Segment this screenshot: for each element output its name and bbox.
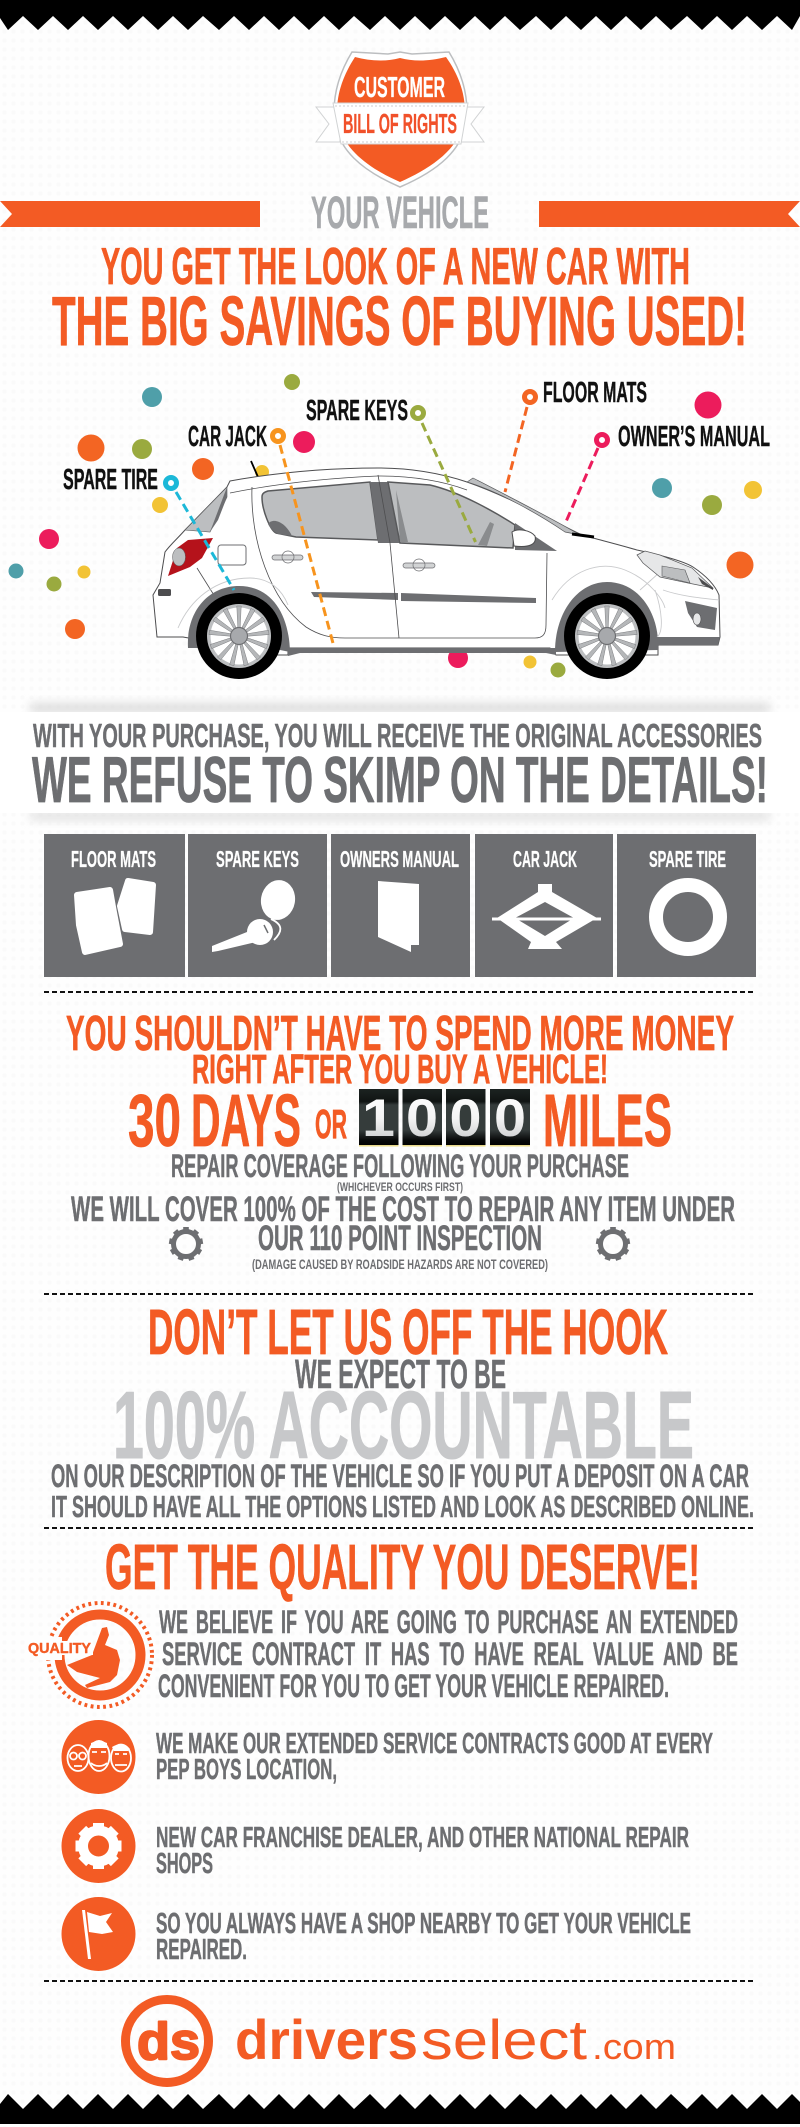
section: accountability — [51, 1296, 754, 1524]
note: roadside hazards: (DAMAGE CAUSED BY ROADSIDE HAZARDS ARE NOT COVERED) — [252, 1257, 548, 1272]
tail light — [168, 538, 213, 576]
logo monogram: ds — [137, 2013, 200, 2071]
panel: spare tire — [617, 834, 756, 977]
odometer: 1000: 0 — [406, 1089, 438, 1148]
headlight — [637, 551, 713, 590]
rear wheel — [196, 593, 282, 679]
dashed dividers — [44, 992, 756, 1981]
callout: car jack — [188, 421, 334, 647]
icon: quality thumbs-up badge: QUALITY — [28, 1641, 91, 1657]
illustration: white hatchback car — [153, 461, 720, 679]
benefit 2 line 2: SHOPS — [156, 1848, 213, 1880]
callout: spare keys: SPARE KEYS — [306, 395, 408, 427]
icon: gear left — [169, 1227, 203, 1261]
odometer: 1000 — [359, 1089, 530, 1148]
badge: customer bill of rights — [316, 52, 484, 187]
benefit 3 line 2: REPAIRED. — [156, 1934, 247, 1966]
icon: manual — [378, 881, 419, 952]
front seat shadow — [396, 490, 494, 546]
icon: keys — [212, 877, 298, 952]
panel: floor mats — [44, 834, 185, 977]
banner text: YOUR VEHICLE — [311, 187, 489, 238]
odometer: 1000: 1 — [362, 1089, 395, 1148]
callout: spare tire — [63, 464, 234, 590]
panel: spare tire: SPARE TIRE — [649, 846, 726, 872]
antenna — [251, 461, 266, 478]
benefit 1 line 2: PEP BOYS LOCATION, — [156, 1754, 337, 1786]
arch lines — [178, 566, 719, 637]
subhead: WE EXPECT TO BE — [295, 1351, 506, 1397]
sill — [288, 648, 556, 656]
front door window — [388, 482, 515, 548]
wiper — [572, 534, 594, 537]
icon: quality thumbs-up badge — [26, 1603, 152, 1707]
panel: car jack: CAR JACK — [513, 846, 577, 872]
door trim — [311, 592, 536, 603]
callout: owner's manual — [565, 421, 770, 524]
note: whichever occurs first: (WHICHEVER OCCURS FIRST) — [337, 1182, 463, 1194]
rear reflector — [158, 589, 171, 596]
section: repair coverage — [66, 1007, 735, 1272]
wing mirror — [512, 530, 535, 547]
callout: car jack: CAR JACK — [188, 421, 267, 453]
icon: gear badge — [62, 1809, 136, 1883]
badge text: CUSTOMER — [354, 72, 445, 104]
car body — [153, 468, 720, 655]
icon: gear right — [596, 1227, 630, 1261]
label: or: OR — [315, 1101, 347, 1147]
door handles — [272, 551, 435, 571]
rear door window — [262, 482, 378, 540]
panel: floor mats: FLOOR MATS — [71, 846, 156, 872]
wordmark: drivers: drivers — [235, 2008, 418, 2071]
pillar — [370, 482, 400, 543]
panel: spare keys: SPARE KEYS — [216, 846, 299, 872]
panel: car jack — [475, 834, 613, 977]
icon: flag badge — [62, 1897, 136, 1971]
wordmark: select: select — [421, 2008, 587, 2071]
ribbon — [316, 103, 484, 144]
callout: spare tire: SPARE TIRE — [63, 464, 158, 496]
headline — [52, 238, 747, 360]
roof line — [230, 476, 467, 493]
stat: days: DAYS — [191, 1079, 301, 1162]
callout: floor mats: FLOOR MATS — [543, 377, 647, 409]
confetti dots — [8, 374, 762, 678]
panel: original accessories strip — [0, 704, 800, 819]
wordmark: .com: .com — [592, 2026, 676, 2067]
stat: 30: 30 — [128, 1079, 181, 1162]
odometer: 1000: 0 — [494, 1089, 526, 1148]
ribbon text: BILL OF RIGHTS — [343, 108, 457, 139]
section banner: your vehicle — [0, 187, 800, 238]
banner left — [0, 201, 260, 227]
icon: jack — [492, 884, 601, 949]
panel: owners manual: OWNERS MANUAL — [340, 846, 459, 872]
rear glass — [185, 487, 227, 532]
windshield — [467, 478, 580, 535]
bottom zigzag border — [0, 2094, 800, 2124]
bumper — [657, 637, 720, 645]
logo ring — [126, 2000, 208, 2082]
shield — [334, 52, 467, 187]
banner right — [539, 201, 800, 227]
callout: floor mats — [505, 377, 647, 492]
icon: tire — [656, 885, 720, 949]
icon: floor mats — [77, 881, 153, 952]
rear seat shadow — [268, 521, 292, 536]
body line 2: OUR 110 POINT INSPECTION — [258, 1219, 542, 1258]
section: quality — [26, 1531, 738, 1971]
odometer: 1000: 0 — [450, 1089, 482, 1148]
callouts: car accessories — [63, 377, 770, 647]
door mirror shadow — [515, 523, 557, 551]
icon: pep boys faces — [62, 1720, 136, 1794]
grille — [685, 601, 717, 630]
front wheel — [564, 593, 650, 679]
top zigzag border — [0, 0, 800, 30]
fuel cap — [218, 545, 246, 565]
stat: miles: MILES — [543, 1079, 672, 1162]
door lines — [197, 475, 547, 638]
wheel arches — [188, 582, 658, 652]
logo: driversselect.com — [126, 2000, 676, 2082]
panel: spare keys — [188, 834, 327, 977]
callout: spare keys — [306, 395, 476, 542]
panel: owners manual — [331, 834, 470, 977]
